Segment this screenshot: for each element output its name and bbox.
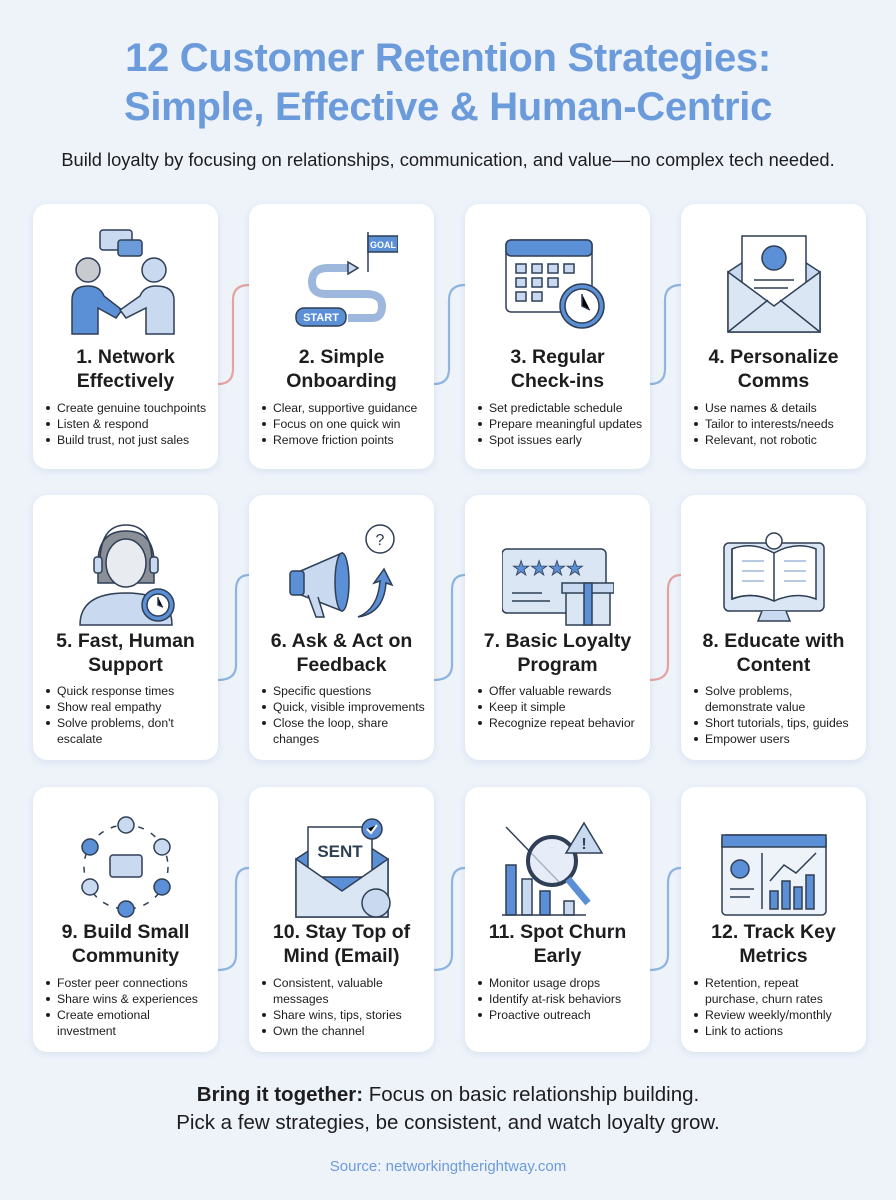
card title: 12. Track Key [711, 921, 836, 943]
icon: handshake [71, 229, 175, 335]
card title: 4. Personalize [708, 346, 839, 368]
bullets: Offer valuable rewards [489, 684, 611, 698]
icon: sent email: SENT [317, 842, 363, 861]
bullets: Identify at-risk behaviors [489, 992, 621, 1006]
icon: megaphone [289, 524, 395, 618]
bullets [694, 976, 832, 1038]
card title [484, 630, 632, 676]
card title: Program [517, 654, 598, 676]
icon: support agent [79, 524, 175, 626]
icon: churn magnifier: ! [581, 836, 587, 853]
card title: 11. Spot Churn [489, 921, 626, 943]
icon: dashboard [721, 834, 827, 916]
card 3 [465, 204, 650, 469]
bullets [478, 401, 642, 447]
icon: start to goal [295, 232, 398, 327]
card title: Community [72, 945, 179, 967]
bullets: Consistent, valuable [273, 976, 383, 990]
bullets: changes [273, 732, 319, 746]
title: Simple, Effective & Human-Centric [124, 85, 772, 129]
bullets [46, 684, 174, 746]
icon: community circle [81, 816, 171, 918]
bullets [478, 684, 635, 730]
card title: 1. Network [76, 346, 175, 368]
bullets: Review weekly/monthly [705, 1008, 832, 1022]
card title: 8. Educate with [703, 630, 844, 652]
bullets: Proactive outreach [489, 1008, 591, 1022]
icon: start to goal: START [303, 312, 339, 324]
card title: Feedback [297, 654, 386, 676]
bullets: Create genuine touchpoints [57, 401, 206, 415]
bullets: Keep it simple [489, 700, 566, 714]
card 10 [249, 787, 434, 1052]
bullets: Close the loop, share [273, 716, 388, 730]
card title [76, 346, 175, 392]
icon: megaphone: ? [376, 532, 385, 549]
bullets: Monitor usage drops [489, 976, 600, 990]
card title: Effectively [77, 370, 174, 392]
card 1 [33, 204, 218, 469]
bullets [694, 401, 834, 447]
bullets: Specific questions [273, 684, 371, 698]
bullets: Retention, repeat [705, 976, 799, 990]
bullets: Show real empathy [57, 700, 161, 714]
subtitle: Build loyalty by focusing on relationships, communication, and value—no complex tech needed. [61, 149, 835, 170]
card 7 [465, 495, 650, 760]
bullets: Remove friction points [273, 433, 394, 447]
bullets: Link to actions [705, 1024, 783, 1038]
icon: start to goal: GOAL [370, 240, 397, 250]
card 9 [33, 787, 218, 1052]
footer summary: Bring it together: Focus on basic relationship building. [197, 1083, 699, 1106]
bullets: Focus on one quick win [273, 417, 400, 431]
card title [62, 921, 189, 967]
icon: calendar clock [505, 239, 605, 329]
card title: Content [737, 654, 810, 676]
card title [711, 921, 836, 967]
bullets: Foster peer connections [57, 976, 188, 990]
bullets: Build trust, not just sales [57, 433, 189, 447]
card title [273, 921, 410, 967]
card title: Check-ins [511, 370, 604, 392]
card title: 10. Stay Top of [273, 921, 410, 943]
icon: monitor book bulb [723, 532, 825, 622]
bullets: investment [57, 1024, 116, 1038]
card title [703, 630, 844, 676]
card title: 3. Regular [510, 346, 605, 368]
card title: 7. Basic Loyalty [484, 630, 631, 652]
bullets: demonstrate value [705, 700, 805, 714]
bullets [46, 976, 198, 1038]
card title: Mind (Email) [284, 945, 399, 967]
bullets: Share wins, tips, stories [273, 1008, 402, 1022]
title: 12 Customer Retention Strategies: [125, 36, 771, 80]
bullets: messages [273, 992, 329, 1006]
bullets: Short tutorials, tips, guides [705, 716, 849, 730]
card title: Metrics [739, 945, 808, 967]
card title: Support [88, 654, 163, 676]
bullets: Solve problems, [705, 684, 792, 698]
bullets: Listen & respond [57, 417, 148, 431]
card title: 2. Simple [299, 346, 384, 368]
bullets: Solve problems, don't [57, 716, 174, 730]
bullets: Share wins & experiences [57, 992, 198, 1006]
bullets: Relevant, not robotic [705, 433, 817, 447]
bullets: Use names & details [705, 401, 817, 415]
card title [708, 346, 839, 392]
card title: 5. Fast, Human [56, 630, 195, 652]
card 8 [681, 495, 866, 760]
icon: loyalty card gift [502, 548, 614, 626]
card title: Onboarding [286, 370, 397, 392]
bullets: Spot issues early [489, 433, 582, 447]
bullets [262, 684, 425, 746]
card title [271, 630, 412, 676]
bullets [694, 684, 849, 746]
card title [510, 346, 605, 392]
footer summary [176, 1083, 720, 1134]
bullets: Own the channel [273, 1024, 364, 1038]
card 12 [681, 787, 866, 1052]
card 11 [465, 787, 650, 1052]
card title: 6. Ask & Act on [271, 630, 412, 652]
card title: 9. Build Small [62, 921, 189, 943]
icon: envelope letter [727, 235, 821, 333]
card title [489, 921, 626, 967]
card 5 [33, 495, 218, 760]
card 2 [249, 204, 434, 469]
bullets: Create emotional [57, 1008, 150, 1022]
icon: sent email [295, 818, 391, 918]
bullets: Clear, supportive guidance [273, 401, 417, 415]
card title [56, 630, 195, 676]
bullets [478, 976, 621, 1022]
card 6 [249, 495, 434, 760]
bullets [262, 401, 417, 447]
footer summary: Pick a few strategies, be consistent, and watch loyalty grow. [176, 1111, 720, 1134]
icon: loyalty card gift: ★★★★ [512, 556, 584, 580]
bullets: escalate [57, 732, 102, 746]
card title: Comms [738, 370, 809, 392]
source: Source: networkingtherightway.com [330, 1158, 566, 1175]
icon: churn magnifier [502, 822, 604, 916]
bullets: Prepare meaningful updates [489, 417, 642, 431]
bullets [262, 976, 402, 1038]
bullets: Set predictable schedule [489, 401, 622, 415]
title [124, 36, 772, 129]
bullets: Tailor to interests/needs [705, 417, 834, 431]
bullets [46, 401, 206, 447]
card title: Early [534, 945, 581, 967]
card title [286, 346, 397, 392]
bullets: Recognize repeat behavior [489, 716, 635, 730]
bullets: purchase, churn rates [705, 992, 823, 1006]
bullets: Quick, visible improvements [273, 700, 425, 714]
card 4 [681, 204, 866, 469]
bullets: Quick response times [57, 684, 174, 698]
bullets: Empower users [705, 732, 790, 746]
